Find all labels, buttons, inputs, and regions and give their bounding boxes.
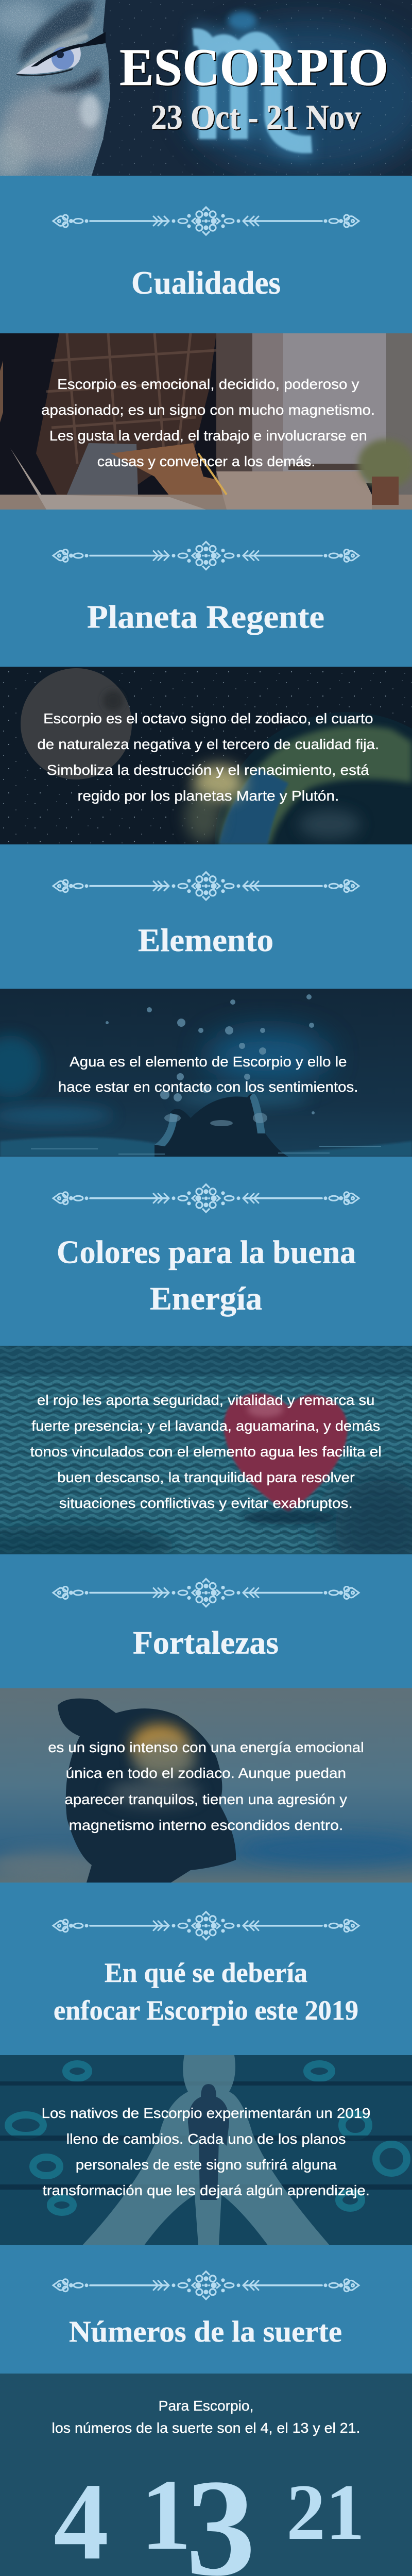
- text: fortalezas: es un signo intenso con una energía emocional: [48, 1739, 364, 1755]
- panel: colores photo: [0, 1346, 412, 1554]
- text: enfoque: lleno de cambios. Cada uno de los planos: [66, 2131, 346, 2147]
- photo: water splash: [0, 989, 412, 1157]
- heading: Colores para la buena Energía: [57, 1233, 356, 1317]
- text: planeta regente: regido por los planetas Marte y Plutón.: [77, 788, 339, 804]
- text: cualidades: Les gusta la verdad, el trabajo e involucrarse en: [49, 428, 367, 444]
- text: elemento: hace estar en contacto con los sentimientos.: [58, 1079, 358, 1095]
- heading: Colores para la buena Energía: Energía: [150, 1280, 262, 1317]
- panel: enfoque 2019 photo: [0, 2055, 412, 2245]
- number: 13: 1: [141, 2458, 192, 2571]
- text: fortalezas: aparecer tranquilos, tienen una agresión y: [65, 1791, 347, 1807]
- text: enfoque: [42, 2105, 370, 2198]
- ornament divider: [53, 872, 359, 900]
- text: colores: tonos vinculados con el elemento agua les facilita el: [30, 1444, 382, 1460]
- text: planeta regente: [37, 710, 379, 804]
- heading: En qué se debería enfocar Escorpio este 2019: enfocar Escorpio este 2019: [54, 1995, 358, 2026]
- ornament divider: [53, 207, 359, 235]
- text: elemento: [58, 1054, 358, 1095]
- panel: cualidades photo: [0, 333, 412, 510]
- text: colores: situaciones conflictivas y evitar exabruptos.: [59, 1495, 353, 1511]
- text: enfoque: transformación que les dejará algún aprendizaje.: [43, 2182, 370, 2198]
- date range: 23 Oct - 21 Nov: [151, 97, 360, 137]
- text: planeta regente: Escorpio es el octavo signo del zodiaco, el cuarto: [43, 710, 373, 726]
- panel: hero header: [0, 0, 412, 176]
- scorpio glyph: [193, 37, 312, 144]
- text: enfoque: personales de este signo sufrirá alguna: [76, 2157, 337, 2173]
- text: numeros intro: [52, 2398, 360, 2436]
- number: 21: 21: [286, 2468, 365, 2556]
- text: cualidades: Escorpio es emocional, decidido, poderoso y: [57, 376, 359, 392]
- panel: colores heading: [52, 1183, 360, 1317]
- heading: Fortalezas: Fortalezas: [133, 1624, 279, 1661]
- text: colores: [30, 1392, 382, 1511]
- panel: elemento heading: [52, 871, 360, 958]
- text: fortalezas: [48, 1739, 364, 1833]
- main title: ESCORPIO: [119, 38, 388, 97]
- ornament divider: [53, 1912, 359, 1940]
- panel: planeta regente heading: [52, 540, 360, 635]
- ornament divider: [53, 2272, 359, 2299]
- text: fortalezas: magnetismo interno escondidos dentro.: [69, 1817, 343, 1833]
- photo: digital human figure and binary: [0, 2055, 412, 2245]
- heading: Cualidades: Cualidades: [131, 264, 281, 301]
- panel: enfoque 2019 heading: [52, 1910, 360, 2026]
- heading: Colores para la buena Energía: Colores para la buena: [57, 1233, 356, 1270]
- panel: numeros heading: [52, 2270, 360, 2348]
- hero photo: face and scorpio glyph: [0, 0, 412, 180]
- text: planeta regente: Simboliza la destrucción y el renacimiento, está: [47, 762, 369, 778]
- panel: planeta regente photo: [0, 667, 412, 844]
- text: cualidades: apasionado; es un signo con mucho magnetismo.: [41, 402, 375, 418]
- text: numeros intro: los números de la suerte son el 4, el 13 y el 21.: [52, 2420, 360, 2436]
- heading: Números de la suerte: Números de la suerte: [69, 2315, 342, 2348]
- text: colores: buen descanso, la tranquilidad para resolver: [57, 1469, 355, 1485]
- ornament divider: [53, 542, 359, 570]
- text: elemento: Agua es el elemento de Escorpio y ello le: [70, 1054, 347, 1070]
- text: enfoque: Los nativos de Escorpio experimentarán un 2019: [42, 2105, 370, 2121]
- panel: fortalezas photo: [0, 1688, 412, 1883]
- text: colores: fuerte presencia; y el lavanda, aguamarina, y demás: [31, 1418, 380, 1434]
- photo: silhouette at sunset over sea: [0, 1688, 412, 1883]
- text: numeros intro: Para Escorpio,: [159, 2398, 253, 2414]
- text: colores: el rojo les aporta seguridad, vitalidad y remarca su: [37, 1392, 374, 1408]
- panel: cualidades heading: [52, 206, 360, 301]
- panel: numeros de la suerte: [0, 2374, 412, 2576]
- heading: Elemento: Elemento: [138, 922, 273, 958]
- heading: En qué se debería enfocar Escorpio este 2019: En qué se debería: [105, 1957, 307, 1988]
- heading: En qué se debería enfocar Escorpio este 2019: [54, 1957, 358, 2026]
- photo: moon and earth in space: [0, 667, 412, 844]
- panel: fortalezas heading: [52, 1578, 360, 1661]
- text: cualidades: [41, 376, 375, 469]
- photo: red heart on teal knit: [0, 1346, 412, 1554]
- text: cualidades: causas y convencer a los demás.: [97, 453, 315, 469]
- ornament divider: [53, 1579, 359, 1606]
- photo: person writing at a desk: [0, 333, 412, 510]
- text: planeta regente: de naturaleza negativa y el tercero de cualidad fija.: [37, 736, 379, 752]
- panel: elemento photo: [0, 989, 412, 1157]
- ornament divider: [53, 1184, 359, 1212]
- text: fortalezas: única en todo el zodiaco. Aunque puedan: [66, 1765, 346, 1781]
- heading: Planeta Regente: Planeta Regente: [87, 599, 324, 635]
